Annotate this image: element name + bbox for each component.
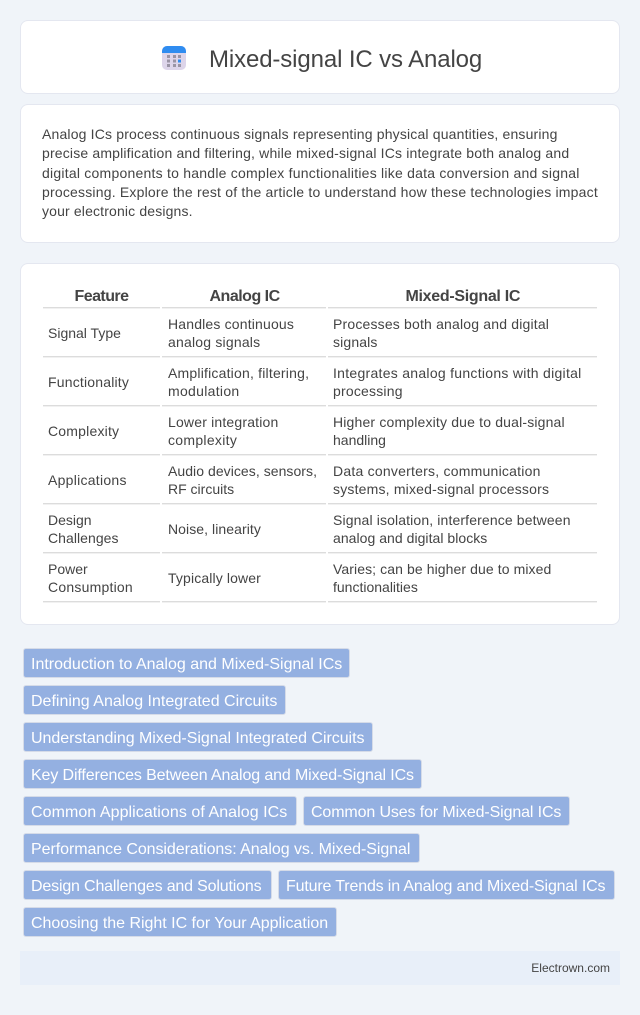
tag: Introduction to Analog and Mixed-Signal ICs bbox=[31, 656, 342, 673]
tag: Defining Analog Integrated Circuits bbox=[31, 693, 277, 710]
intro text: Analog ICs process continuous signals representing physical quantities, ensuring bbox=[42, 126, 558, 142]
row: complexity: Lower integration bbox=[168, 414, 278, 430]
panel: title card bbox=[20, 20, 620, 94]
row: applications: Applications bbox=[48, 472, 127, 488]
table header: Mixed-Signal IC bbox=[406, 288, 520, 305]
row: signal type: Handles continuous bbox=[168, 316, 294, 332]
tag bbox=[23, 722, 373, 752]
tag bbox=[23, 796, 297, 826]
row: functionality: processing bbox=[333, 383, 403, 399]
row: design challenges: Design bbox=[48, 512, 92, 528]
tag bbox=[23, 870, 272, 900]
tag: Common Uses for Mixed-Signal ICs bbox=[311, 804, 561, 821]
tag: Choosing the Right IC for Your Application bbox=[31, 915, 328, 932]
footer bbox=[20, 951, 620, 985]
tag bbox=[303, 796, 570, 826]
intro text: your electronic designs. bbox=[42, 203, 193, 219]
intro text: processing. Explore the rest of the article to understand how these technologies impact bbox=[42, 184, 598, 200]
tag: Understanding Mixed-Signal Integrated Circuits bbox=[31, 730, 364, 747]
intro text bbox=[42, 126, 598, 219]
intro text: digital components to handle complex functionalities like data conversion and signal bbox=[42, 165, 580, 181]
tag bbox=[278, 870, 615, 900]
row: complexity: Complexity bbox=[48, 423, 119, 439]
row: design challenges: Signal isolation, interference between bbox=[333, 512, 571, 528]
icon: calendar bbox=[162, 46, 186, 70]
row: functionality: modulation bbox=[168, 383, 240, 399]
row: signal type: analog signals bbox=[168, 334, 260, 350]
row: power consumption: Typically lower bbox=[168, 570, 261, 586]
footer credit: Electrown.com bbox=[531, 961, 610, 975]
row: design challenges bbox=[48, 512, 571, 546]
table header bbox=[74, 288, 520, 305]
row: applications: Data converters, communication bbox=[333, 463, 541, 479]
row: applications bbox=[48, 463, 549, 497]
row: signal type: signals bbox=[333, 334, 378, 350]
topic tags bbox=[23, 648, 615, 937]
row: functionality bbox=[48, 365, 582, 399]
row: applications: Audio devices, sensors, bbox=[168, 463, 317, 479]
row: power consumption: Consumption bbox=[48, 579, 133, 595]
table header: Analog IC bbox=[210, 288, 280, 305]
row: design challenges: analog and digital blocks bbox=[333, 530, 487, 546]
row: signal type bbox=[48, 316, 549, 350]
tag: Future Trends in Analog and Mixed-Signal ICs bbox=[286, 878, 605, 895]
row: applications: RF circuits bbox=[168, 481, 234, 497]
row: power consumption: Power bbox=[48, 561, 88, 577]
tag bbox=[23, 685, 286, 715]
row: power consumption: functionalities bbox=[333, 579, 418, 595]
tag: Design Challenges and Solutions bbox=[31, 878, 261, 895]
tag bbox=[23, 833, 420, 863]
row: signal type: Signal Type bbox=[48, 325, 121, 341]
tag bbox=[23, 648, 350, 678]
row: design challenges: Noise, linearity bbox=[168, 521, 261, 537]
tag: Common Applications of Analog ICs bbox=[31, 804, 287, 821]
row: applications: systems, mixed-signal processors bbox=[333, 481, 549, 497]
tag bbox=[23, 759, 422, 789]
tag: Performance Considerations: Analog vs. Mixed-Signal bbox=[31, 841, 410, 858]
panel: comparison table bbox=[20, 263, 620, 625]
row: complexity: complexity bbox=[168, 432, 237, 448]
row: power consumption: Varies; can be higher due to mixed bbox=[333, 561, 551, 577]
row: power consumption bbox=[48, 561, 551, 595]
row: complexity: Higher complexity due to dual-signal bbox=[333, 414, 565, 430]
row: functionality: Functionality bbox=[48, 374, 129, 390]
panel: introduction bbox=[20, 104, 620, 243]
row: complexity: handling bbox=[333, 432, 386, 448]
row: signal type: Processes both analog and digital bbox=[333, 316, 549, 332]
row: functionality: Integrates analog functions with digital bbox=[333, 365, 582, 381]
table header: Feature bbox=[74, 288, 128, 305]
tag: Key Differences Between Analog and Mixed-Signal ICs bbox=[31, 767, 414, 784]
row: functionality: Amplification, filtering, bbox=[168, 365, 309, 381]
row: complexity bbox=[48, 414, 565, 448]
intro text: precise amplification and filtering, while mixed-signal ICs integrate both analog and bbox=[42, 145, 569, 161]
title: Mixed-signal IC vs Analog bbox=[209, 46, 482, 73]
row: design challenges: Challenges bbox=[48, 530, 119, 546]
tag bbox=[23, 907, 337, 937]
